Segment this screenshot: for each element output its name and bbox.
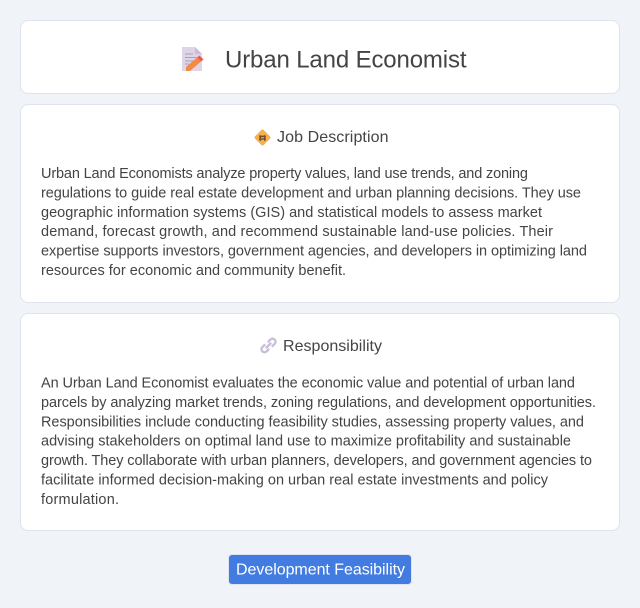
text block: responsibility body: An Urban Land Economist evaluates the economic value and potential of urban land — [41, 376, 575, 392]
text block: job description body: demand, forecast growth, and recommend sustainable land-use policies. Their — [41, 224, 553, 240]
text block: job description body: Urban Land Economists analyze property values, land use trends, and zoning — [41, 166, 528, 182]
text block: responsibility body: parcels by analyzing market trends, zoning regulations, and development opportunities. — [41, 395, 596, 411]
text block: responsibility body: facilitate informed decision-making on urban real estate investments and policy — [41, 472, 549, 488]
icon: construction diamond sign — [254, 129, 271, 146]
button: development feasibility tag: Development Feasibility — [236, 562, 405, 578]
text block: job description body: regulations to guide real estate development and urban planning decisions. They use — [41, 185, 581, 201]
heading text: Job Description — [277, 129, 388, 146]
text block: job description body: resources for economic and community benefit. — [41, 263, 346, 279]
text block: responsibility body: growth. They collaborate with urban planners, developers, and government agencies to — [41, 453, 592, 469]
panel: job description — [20, 104, 620, 303]
heading: job description — [254, 129, 388, 146]
button: development feasibility tag — [229, 555, 411, 584]
text block: job description body: expertise supports investors, government agencies, and developers in optimizing land — [41, 244, 587, 260]
text block: responsibility body: formulation. — [41, 492, 119, 508]
icon: chain link — [260, 338, 277, 354]
text block: job description body — [41, 166, 587, 279]
panel: responsibility — [20, 313, 620, 531]
title: Urban Land Economist — [225, 46, 467, 74]
text block: responsibility body — [41, 376, 596, 508]
icon: document with pencil — [182, 47, 204, 71]
panel: title header — [20, 20, 620, 94]
text block: responsibility body: advising stakeholders on optimal land use to maximize profitability and sustainable — [41, 434, 571, 450]
heading text: Responsibility — [283, 338, 382, 355]
heading: responsibility — [260, 338, 382, 355]
text block: responsibility body: Responsibilities include conducting feasibility studies, assessing property values, and — [41, 414, 584, 430]
text block: job description body: geographic information systems (GIS) and statistical models to assess market — [41, 205, 542, 221]
